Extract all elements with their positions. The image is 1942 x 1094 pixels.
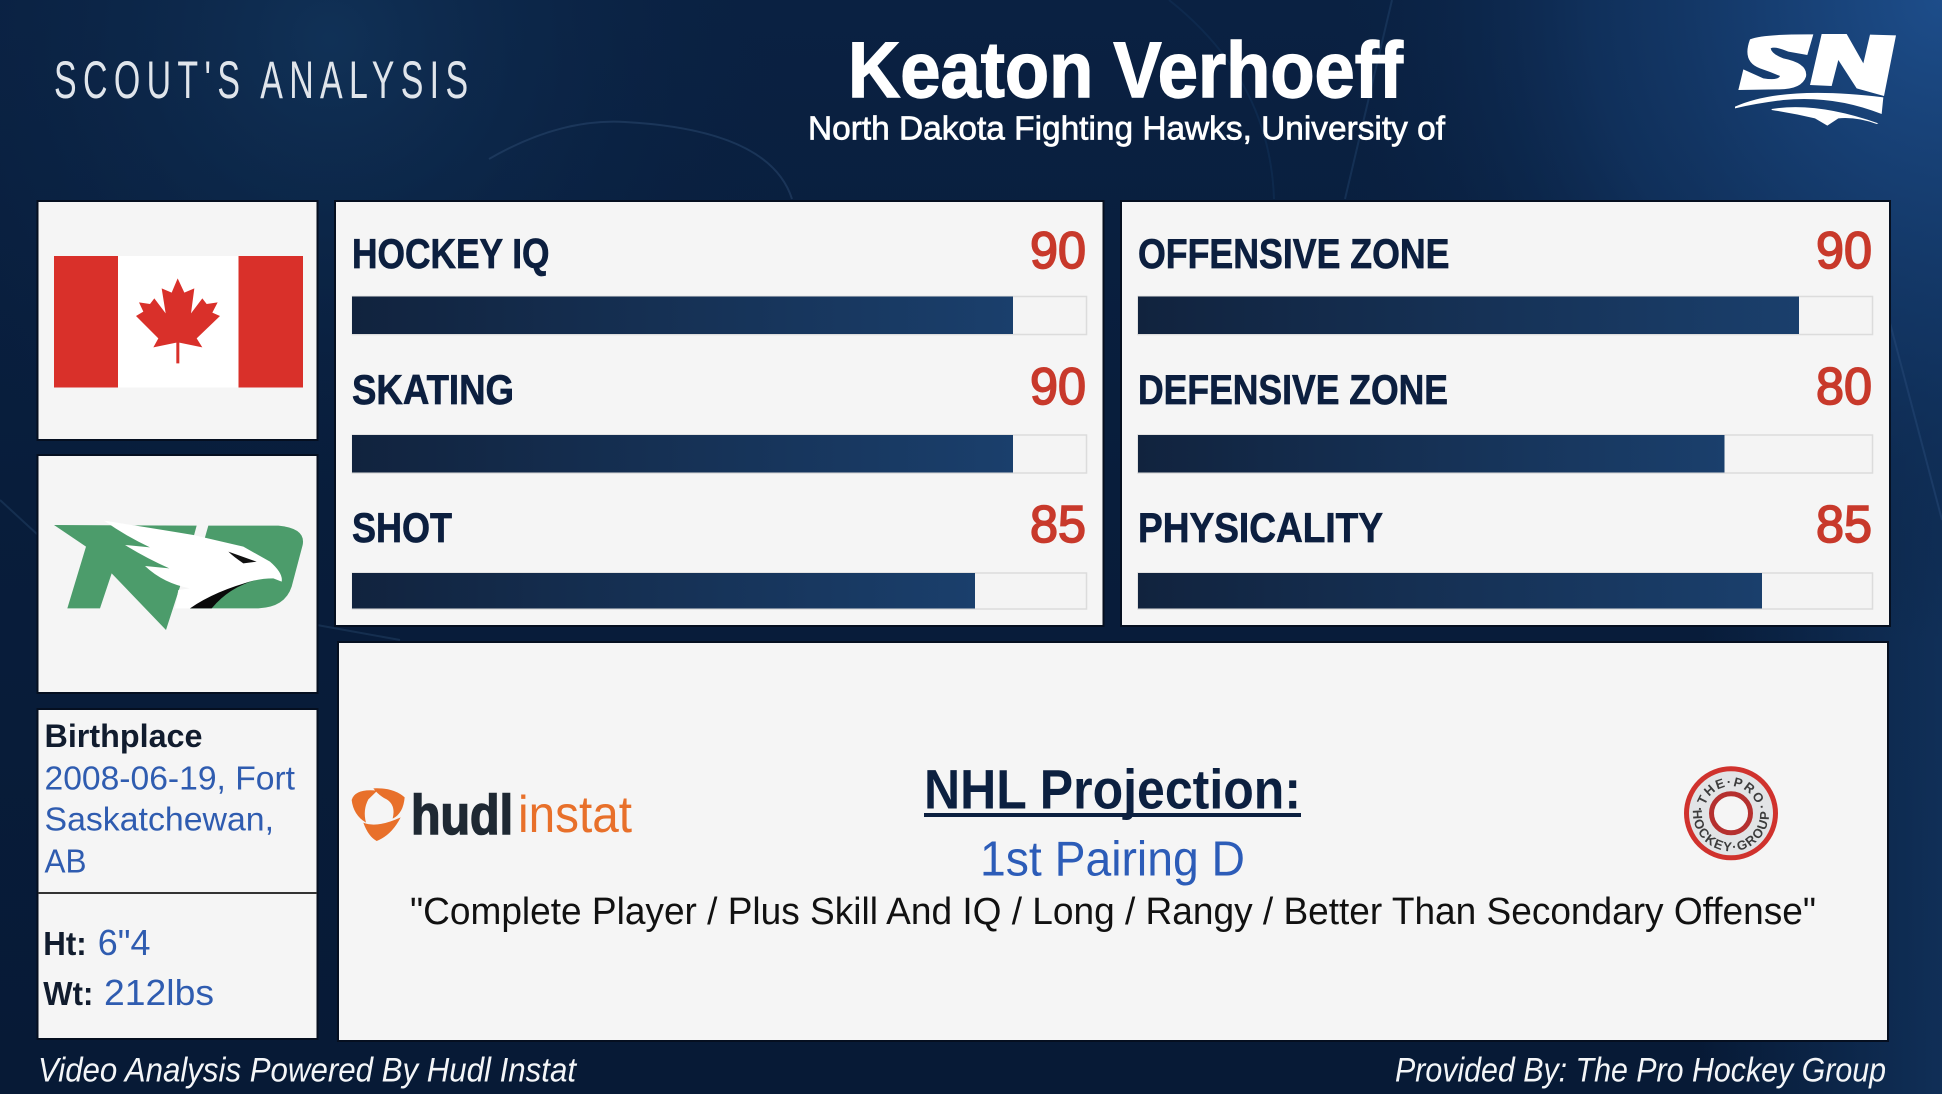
stat: defensive zone: DEFENSIVE ZONE <box>1138 366 1448 413</box>
bio: height: Ht: <box>43 925 87 962</box>
icon: Canadian flag <box>54 256 303 388</box>
stat: shot <box>352 496 1086 609</box>
subtitle: team: North Dakota Fighting Hawks, University of <box>808 110 1446 146</box>
stat: shot: SHOT <box>352 504 452 551</box>
panel: skills ratings <box>335 201 1104 626</box>
footer: provider credit: Provided By: The Pro Hockey Group <box>1395 1052 1886 1090</box>
bio label: birthplace: Birthplace <box>44 718 202 754</box>
panel: NHL projection <box>337 641 1889 1042</box>
bio value: birth date and place: Saskatchewan, <box>44 801 274 838</box>
stat: hockey iq: HOCKEY IQ <box>352 230 550 277</box>
bio: height <box>43 922 150 963</box>
stat: skating: 90 <box>1030 358 1086 416</box>
stat: physicality: 85 <box>1816 496 1872 554</box>
bio: weight: 212lbs <box>104 972 214 1013</box>
bio value: birth date and place: 2008-06-19, Fort <box>44 760 295 796</box>
bio: weight <box>43 972 214 1013</box>
heading: scout's analysis: SCOUT'S ANALYSIS <box>54 52 468 110</box>
title: player name: Keaton Verhoeff <box>848 25 1404 114</box>
stat: hockey iq: 90 <box>1030 222 1086 280</box>
stat: physicality <box>1138 496 1872 609</box>
panel: zone ratings <box>1121 201 1890 626</box>
stat: skating <box>352 358 1086 473</box>
icon: North Dakota Fighting Hawks logo <box>54 521 303 630</box>
panel: team logo <box>38 455 318 693</box>
stat: offensive zone: OFFENSIVE ZONE <box>1138 230 1450 277</box>
stat: defensive zone <box>1138 358 1872 473</box>
stat: offensive zone: 90 <box>1816 222 1872 280</box>
bio value: birth date and place: AB <box>44 842 86 880</box>
stat: physicality: PHYSICALITY <box>1138 504 1383 551</box>
logo: Hudl Instat <box>352 783 632 846</box>
panel: flag of Canada <box>38 201 318 440</box>
logo: The Pro Hockey Group <box>1684 766 1778 860</box>
projection value: 1st Pairing D <box>980 833 1245 887</box>
bio: weight: Wt: <box>43 975 93 1012</box>
icon: Sportsnet SN logo <box>1735 34 1896 126</box>
bio value: birth date and place <box>44 760 295 880</box>
stat: hockey iq <box>352 222 1086 334</box>
logo: The Pro Hockey Group: HOCKEY·GROUP <box>1692 810 1769 852</box>
panel: player bio <box>38 709 318 1039</box>
stat: skating: SKATING <box>352 366 514 413</box>
scout quote: "Complete Player / Plus Skill And IQ / Long / Rangy / Better Than Secondary Offense" <box>410 891 1816 933</box>
logo: Hudl Instat: hudl <box>411 783 513 846</box>
footer: video credit: Video Analysis Powered By Hudl Instat <box>38 1052 577 1090</box>
stat: offensive zone <box>1138 222 1872 334</box>
heading: NHL projection: NHL Projection: <box>924 758 1301 821</box>
logo: The Pro Hockey Group: ·THE·PRO· <box>1696 777 1763 810</box>
bio: height: 6"4 <box>98 922 150 963</box>
stat: shot: 85 <box>1030 496 1086 554</box>
logo: Hudl Instat: instat <box>518 786 632 844</box>
stat: defensive zone: 80 <box>1816 358 1872 416</box>
